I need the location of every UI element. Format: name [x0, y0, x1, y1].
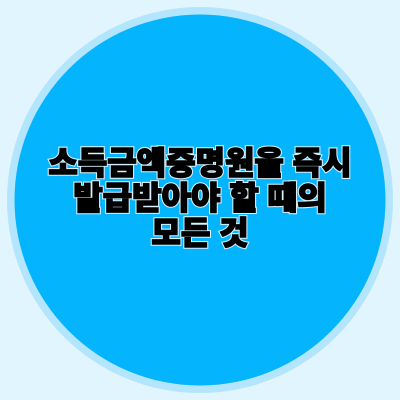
title: 발급받아야 할 때의 [73, 180, 327, 216]
title: 모든 것 [151, 215, 249, 251]
title: 소득금액증명원을 즉시 [48, 145, 352, 181]
title: 발급받아야 할 때의 [73, 180, 327, 216]
title [47, 145, 352, 251]
title: 소득금액증명원을 즉시 [48, 145, 352, 181]
title: 모든 것 [151, 215, 249, 251]
